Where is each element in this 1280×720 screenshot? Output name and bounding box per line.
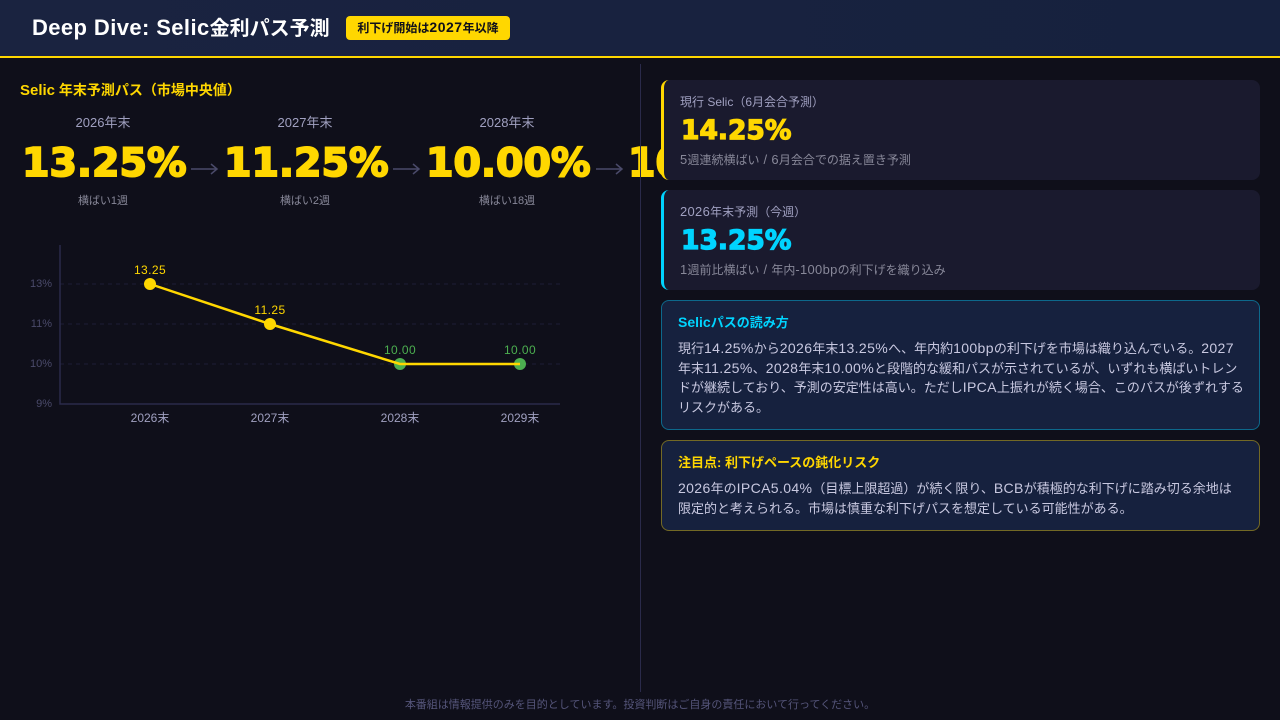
y axis labels: 10%	[30, 358, 52, 370]
card: current Selic	[661, 80, 1260, 180]
y axis labels	[30, 278, 52, 410]
path step 2026	[22, 115, 187, 207]
callout: watch point	[661, 440, 1260, 531]
x axis labels: 2028末	[381, 411, 419, 425]
title: Deep Dive: Selic金利パス予測	[32, 15, 330, 40]
callout: how to read the path: 現行14.25%から2026年末13.25%へ、年内約100bpの利下げを市場は織り込んでいる。2027	[678, 340, 1234, 356]
data labels: 10.00	[384, 343, 416, 357]
path step 2027	[224, 115, 389, 207]
badge: 利下げ開始は2027年以降	[357, 19, 499, 35]
path step 2028: 10.00%	[426, 140, 591, 186]
data points	[144, 278, 526, 370]
section heading: Selic 年末予測パス（市場中央値）	[20, 82, 241, 99]
callout: how to read the path: ドが継続しており、予測の安定性は高い。ただしIPCA上振れが続く場合、このパスが後ずれする	[678, 379, 1244, 395]
x axis labels	[131, 411, 539, 425]
callout: watch point: 注目点: 利下げペースの鈍化リスク	[678, 455, 880, 470]
y axis labels: 11%	[31, 318, 52, 330]
arrow	[393, 164, 420, 174]
card: current Selic: 現行 Selic（6月会合予測）	[680, 95, 824, 109]
path step 2027: 11.25%	[224, 140, 389, 186]
arrow	[191, 164, 218, 174]
callout: how to read the path	[661, 300, 1260, 430]
header bar	[0, 0, 1280, 58]
card: current Selic: 5週連続横ばい / 6月会合での据え置き予測	[680, 152, 911, 167]
card: current Selic: 14.25%	[681, 115, 791, 146]
y axis labels: 13%	[30, 278, 52, 290]
data labels: 11.25	[254, 303, 286, 317]
card: 2026 year-end forecast: 2026年末予測（今週）	[680, 204, 806, 219]
card: 2026 year-end forecast: 1週前比横ばい / 年内-100bpの利下げを織り込み	[680, 262, 946, 277]
path step 2027: 横ばい2週	[280, 195, 330, 207]
data line	[150, 284, 520, 364]
data labels: 10.00	[504, 343, 536, 357]
path step 2026: 13.25%	[22, 140, 187, 186]
data labels	[134, 263, 536, 357]
path step 2027: 2027年末	[278, 115, 332, 130]
x axis labels: 2029末	[501, 411, 539, 425]
column divider	[640, 64, 641, 692]
line chart	[30, 245, 560, 425]
callout: how to read the path: Selicパスの読み方	[678, 314, 789, 330]
x axis labels: 2027末	[251, 411, 289, 425]
badge	[346, 16, 510, 40]
path step 2026: 2026年末	[76, 115, 130, 130]
x axis labels: 2026末	[131, 411, 169, 425]
panel: left year-end path	[20, 82, 793, 359]
footer disclaimer: 本番組は情報提供のみを目的としています。投資判断はご自身の責任において行ってください。	[405, 699, 875, 711]
arrow	[596, 164, 623, 174]
callout: how to read the path: 年末11.25%、2028年末10.00%と段階的な緩和パスが示されているが、いずれも横ばいトレン	[678, 360, 1237, 376]
path step 2029 overflowing under cards: 10.00%	[628, 140, 793, 186]
data labels: 13.25	[134, 263, 166, 277]
y axis labels: 9%	[36, 398, 52, 410]
path step 2028	[426, 115, 591, 207]
callout: watch point: 限定的と考えられる。市場は慎重な利下げパスを想定している可能性がある。	[678, 500, 1133, 516]
callout: how to read the path: リスクがある。	[678, 400, 769, 414]
card: 2026 year-end forecast: 13.25%	[681, 225, 791, 256]
path step 2028: 2028年末	[480, 115, 534, 130]
callout: watch point: 2026年のIPCA5.04%（目標上限超過）が続く限り、BCBが積極的な利下げに踏み切る余地は	[678, 480, 1232, 496]
card: 2026 year-end forecast	[661, 190, 1260, 290]
path step 2028: 横ばい18週	[479, 195, 535, 207]
path step 2026: 横ばい1週	[78, 195, 128, 207]
